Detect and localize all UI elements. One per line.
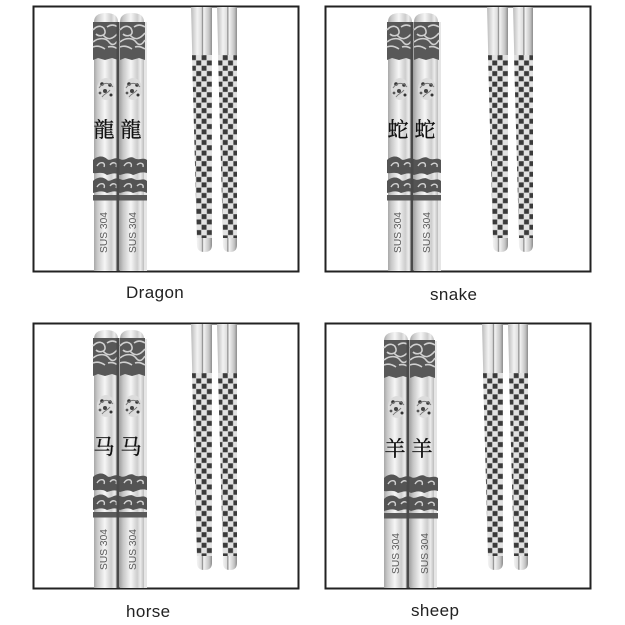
chopstick tips pair: snake: 蛇 bbox=[414, 118, 436, 142]
chopstick tips pair: snake: SUS 304 bbox=[392, 212, 404, 253]
chopstick tips pair: snake: 蛇 bbox=[388, 118, 408, 142]
chopstick handles with checker pattern: sheep bbox=[482, 324, 528, 570]
panel: sheep bbox=[326, 324, 590, 619]
chopstick tips pair: Dragon: 龍 bbox=[94, 118, 114, 142]
chopstick tips pair: sheep: SUS 304 bbox=[390, 533, 402, 574]
panel: snake bbox=[326, 6, 590, 300]
chopstick tips pair: horse: SUS 304 bbox=[127, 529, 139, 570]
chopstick tips pair: horse: 马 bbox=[94, 435, 114, 459]
chopstick tips pair: Dragon: SUS 304 bbox=[127, 212, 139, 253]
caption: sheep: sheep bbox=[411, 601, 459, 620]
chopstick tips pair: horse: SUS 304 bbox=[98, 529, 110, 570]
chopstick tips pair: Dragon: SUS 304 bbox=[98, 212, 110, 253]
chopstick tips pair: snake: SUS 304 bbox=[421, 212, 433, 253]
caption: snake: snake bbox=[430, 285, 477, 304]
panel: Dragon bbox=[34, 6, 298, 300]
caption: horse: horse bbox=[126, 602, 171, 621]
chopstick tips pair: Dragon: 龍 bbox=[120, 118, 142, 142]
chopstick tips pair: sheep: 羊 bbox=[384, 437, 406, 461]
chopstick tips pair: Dragon bbox=[93, 13, 147, 300]
chopstick tips pair: sheep: 羊 bbox=[412, 437, 432, 461]
chopstick tips pair: horse bbox=[93, 330, 147, 617]
chopstick tips pair: snake bbox=[387, 13, 441, 300]
caption: Dragon: Dragon bbox=[126, 283, 184, 302]
chopstick handles with checker pattern: snake bbox=[487, 6, 533, 252]
chopstick tips pair: horse: 马 bbox=[120, 435, 142, 459]
chopstick tips pair: sheep: SUS 304 bbox=[419, 533, 431, 574]
chopstick tips pair: sheep bbox=[384, 332, 438, 619]
chopstick handles with checker pattern: horse bbox=[191, 324, 237, 570]
chopstick handles with checker pattern: Dragon bbox=[191, 6, 237, 252]
panel: horse bbox=[34, 324, 298, 617]
